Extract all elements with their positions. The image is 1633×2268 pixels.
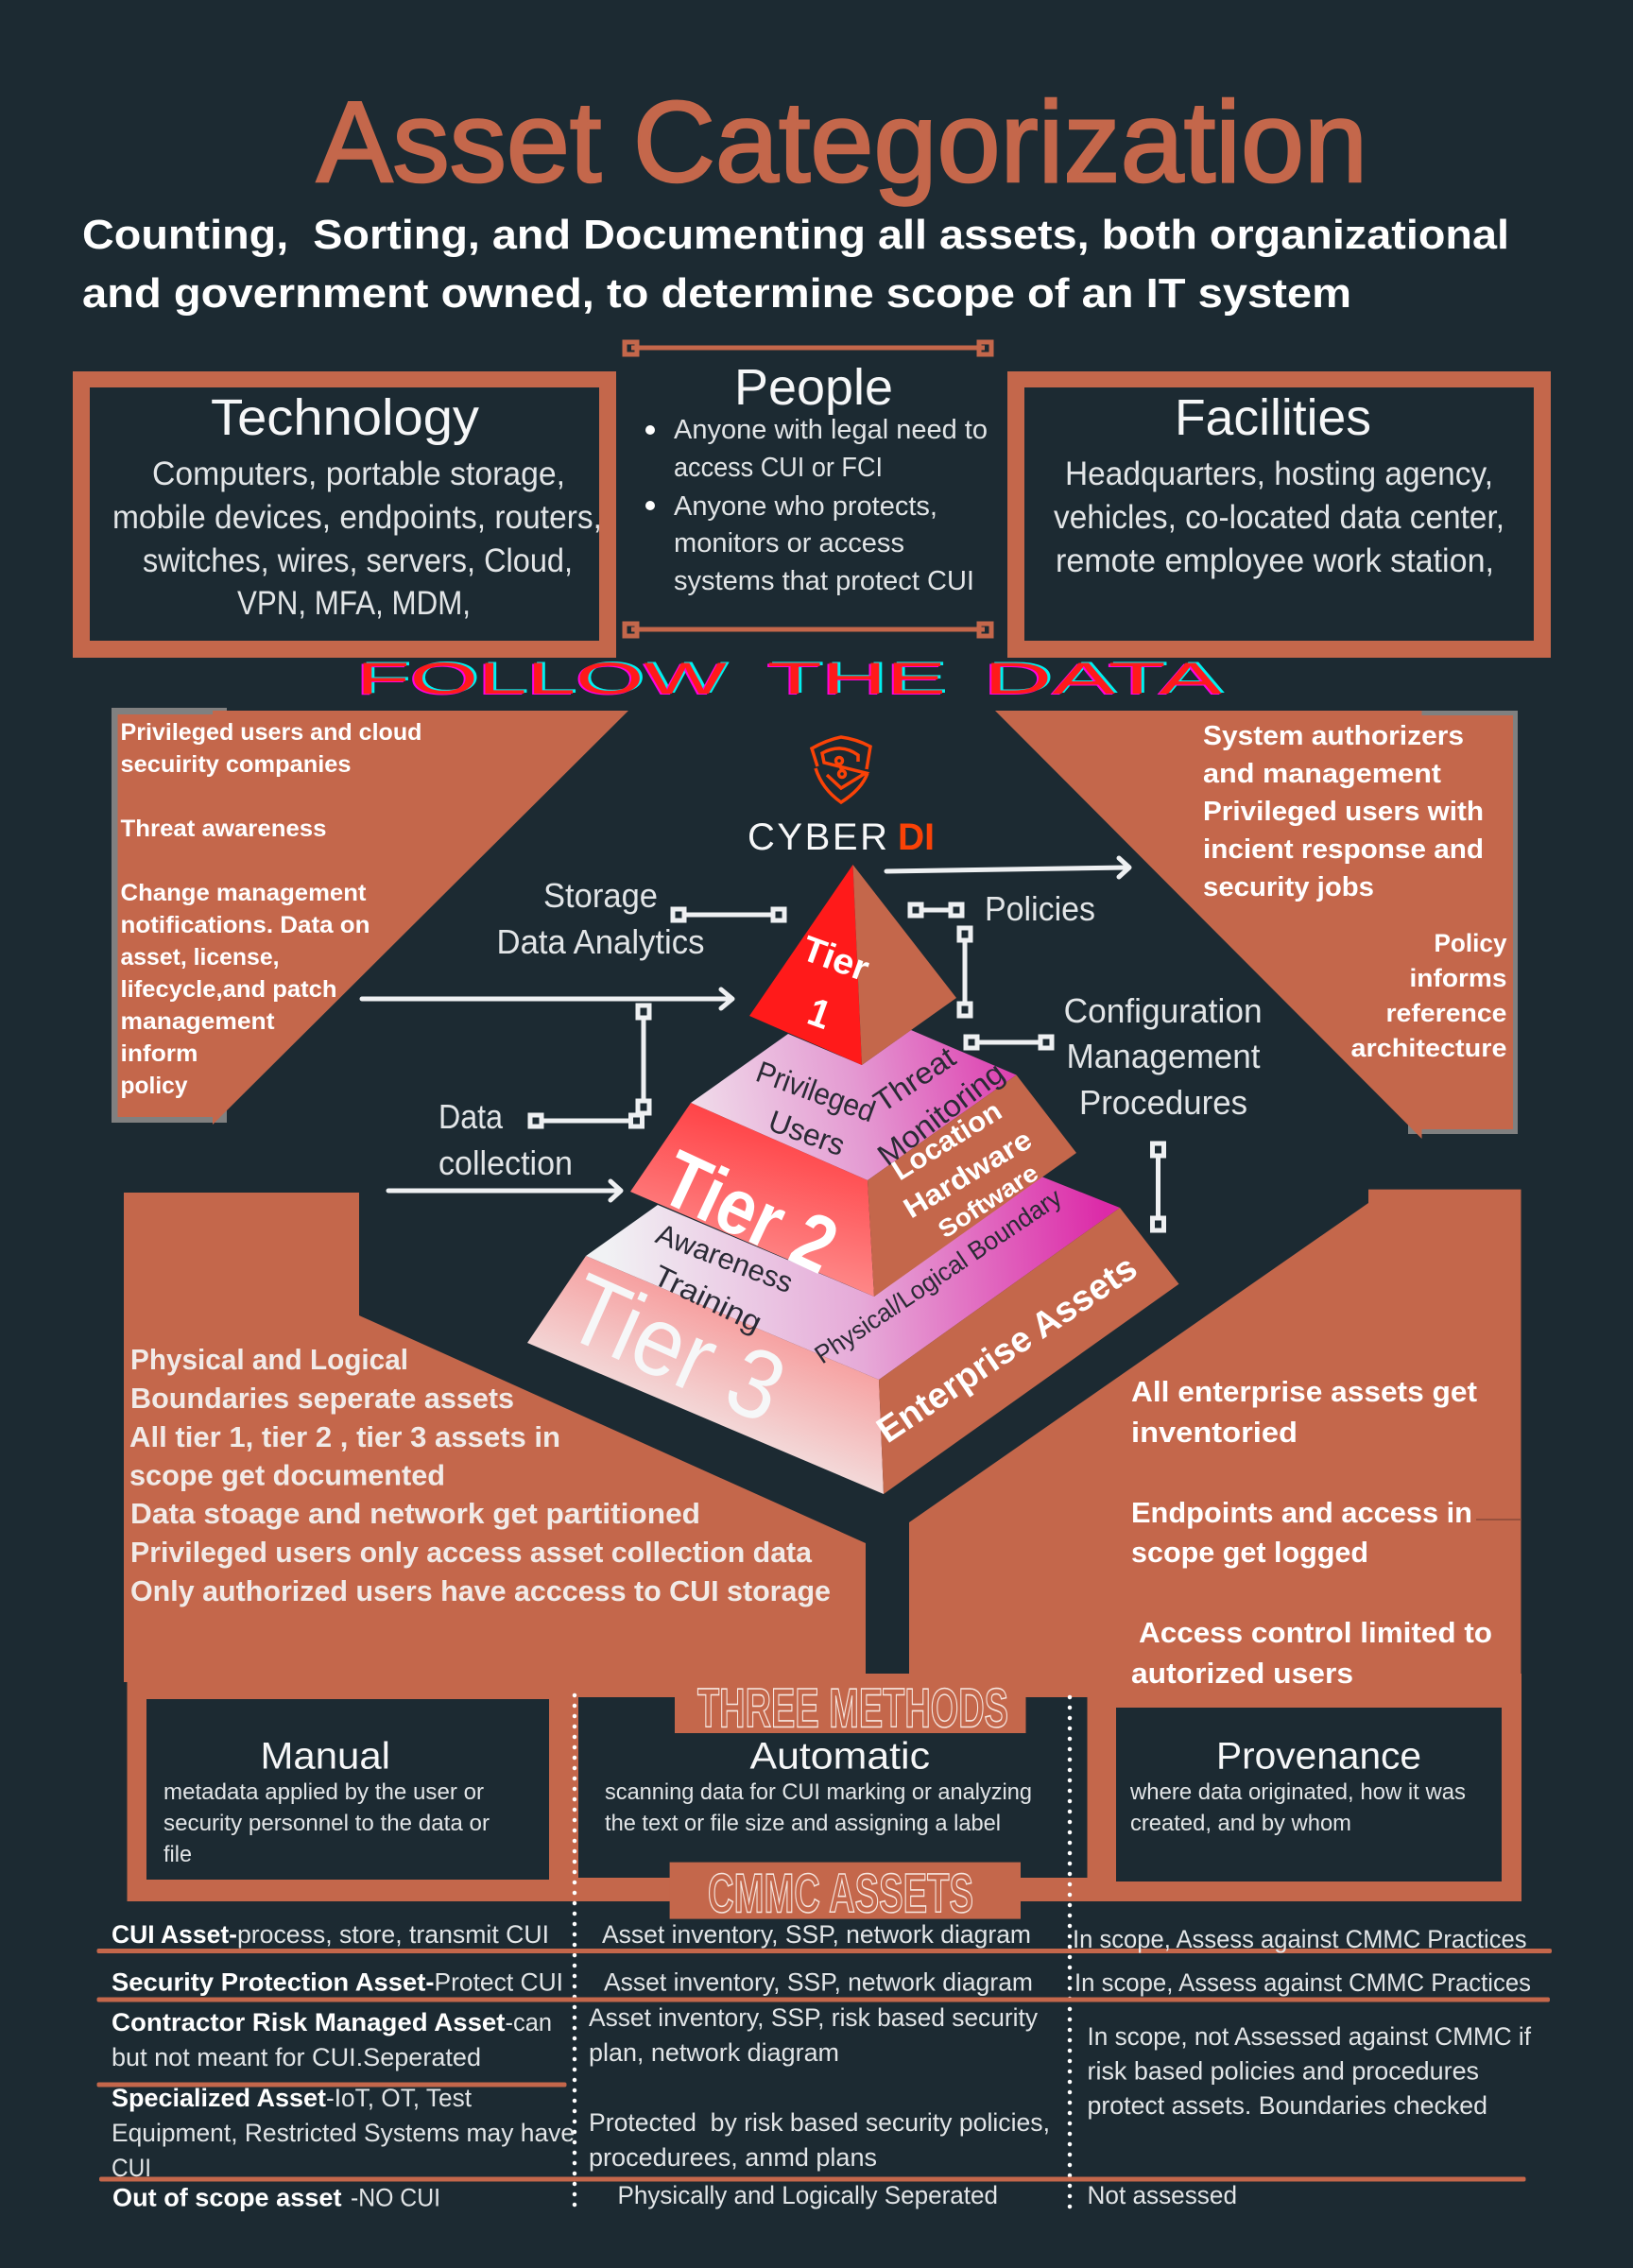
text: technology list bbox=[112, 455, 602, 622]
column: asset names: -NO CUI bbox=[351, 2183, 440, 2211]
heading: follow the data: FOLLOW bbox=[354, 654, 726, 704]
column: asset names: CUI Asset- bbox=[112, 1920, 237, 1949]
label: enterprise assets: Enterprise Assets bbox=[870, 1248, 1144, 1451]
column: asset names: Security Protection Asset- bbox=[112, 1967, 435, 1996]
label: awareness training: Awareness bbox=[651, 1217, 798, 1299]
heading: follow the data: FOLLOW bbox=[359, 652, 731, 702]
heading: follow the data: DATA bbox=[984, 653, 1223, 703]
panel: provenance: where data originated, how it was bbox=[1129, 1779, 1466, 1805]
label: location hardware software: Hardware bbox=[899, 1124, 1038, 1225]
column: requirements: Physically and Logically Seperated bbox=[618, 2181, 998, 2209]
text: top right policy: informs bbox=[1410, 964, 1506, 992]
text: bottom right block: All enterprise assets get bbox=[1131, 1375, 1477, 1408]
text: bottom left block: Boundaries seperate assets bbox=[130, 1382, 514, 1415]
label: configuration management procedures bbox=[1064, 991, 1263, 1122]
label: tier 1: Tier bbox=[797, 929, 874, 989]
dotted divider: left bbox=[573, 1695, 576, 2210]
label: storage data analytics bbox=[497, 876, 705, 961]
text: cyber: CYBER bbox=[748, 816, 887, 858]
label: physical logical boundary: Physical/Logical Boundary bbox=[810, 1183, 1067, 1369]
text: bottom right block: Access control limited to bbox=[1139, 1616, 1492, 1649]
text: di: DI bbox=[898, 816, 935, 858]
column: requirements: Asset inventory, SSP, risk based security bbox=[589, 2003, 1038, 2032]
tier 1 right face bbox=[852, 865, 956, 1065]
text: bottom left block: All tier 1, tier 2 , tier 3 assets in bbox=[129, 1420, 560, 1453]
label: tier 1: 1 bbox=[802, 988, 837, 1038]
text: bottom left block: Privileged users only access asset collection data bbox=[130, 1536, 813, 1569]
column: requirements: procedurees, anmd plans bbox=[589, 2143, 877, 2172]
panel: manual bbox=[146, 1699, 549, 1880]
column: requirements bbox=[589, 1920, 1050, 2209]
text: top left triangle: notifications. Data on bbox=[121, 912, 370, 938]
connector: people top bbox=[625, 342, 991, 354]
label: data collection bbox=[438, 1097, 573, 1182]
label: location hardware software: Location bbox=[886, 1095, 1007, 1187]
connector: policies vertical bbox=[959, 928, 971, 1016]
text: top right policy: reference bbox=[1385, 999, 1506, 1027]
text: bottom left block bbox=[129, 1343, 831, 1607]
label: threat monitoring: Monitoring bbox=[871, 1056, 1010, 1173]
panel: technology bbox=[73, 371, 616, 658]
label: location hardware software: Software bbox=[933, 1159, 1043, 1244]
heading: technology: Technology bbox=[211, 389, 479, 446]
panel: facilities bbox=[1007, 371, 1551, 658]
subtitle: and government owned, to determine scope of an IT system bbox=[82, 270, 1351, 317]
text: people bullets: systems that protect CUI bbox=[674, 566, 974, 596]
text: people bullets: Anyone who protects, bbox=[674, 491, 937, 522]
text: top left triangle: asset, license, bbox=[121, 944, 280, 971]
column: requirements: Asset inventory, SSP, network diagram bbox=[602, 1920, 1031, 1949]
text: bottom right block: scope get logged bbox=[1131, 1536, 1368, 1569]
text: top right policy: Policy bbox=[1435, 929, 1506, 957]
label: storage data analytics: Data Analytics bbox=[497, 922, 705, 961]
column: asset names: Contractor Risk Managed Asset bbox=[112, 2008, 505, 2036]
text: people bullets bbox=[645, 415, 988, 596]
column: asset names: -can bbox=[505, 2008, 552, 2036]
label: tier 3: Tier 3 bbox=[551, 1253, 800, 1445]
heading: facilities: Facilities bbox=[1175, 389, 1371, 446]
text: technology list: switches, wires, servers, Cloud, bbox=[143, 542, 573, 579]
text: bottom left block: scope get documented bbox=[129, 1459, 445, 1491]
tier 2 top face bbox=[691, 1030, 1017, 1180]
panel: manual: metadata applied by the user or bbox=[163, 1779, 484, 1805]
column: asset names: Specialized Asset bbox=[112, 2084, 326, 2112]
column: assessment: protect assets. Boundaries checked bbox=[1087, 2091, 1487, 2120]
heading: follow the data: DATA bbox=[987, 652, 1226, 702]
text: top right authorizers: System authorizers bbox=[1203, 721, 1464, 751]
panel: three methods bbox=[127, 1606, 1521, 1925]
panel: manual: file bbox=[163, 1842, 192, 1867]
connector: policies bbox=[910, 904, 962, 916]
text: top right authorizers: incient response and bbox=[1203, 834, 1484, 865]
connector: people bottom bbox=[625, 624, 991, 636]
panel: top left triangle bbox=[112, 708, 628, 1125]
title: Asset Categorization bbox=[317, 77, 1367, 206]
column: asset names: CUI bbox=[112, 2154, 151, 2182]
panel: bottom right block bbox=[909, 1190, 1521, 1692]
heading: follow the data bbox=[354, 652, 1226, 704]
tier 3 left face bbox=[527, 1256, 884, 1494]
heading: three methods bbox=[675, 1678, 1026, 1739]
subtitle bbox=[82, 212, 1509, 317]
column: assessment: risk based policies and procedures bbox=[1087, 2057, 1479, 2086]
text: top right policy bbox=[1351, 929, 1506, 1062]
text: top left triangle: management bbox=[121, 1008, 275, 1035]
panel: people bbox=[625, 342, 991, 636]
tier 2 left face bbox=[630, 1103, 874, 1297]
text: facilities list: vehicles, co-located data center, bbox=[1054, 499, 1504, 536]
connector: configuration bbox=[966, 1037, 1052, 1048]
text: bottom right block: autorized users bbox=[1131, 1657, 1353, 1690]
panel: automatic: scanning data for CUI marking or analyzing bbox=[605, 1779, 1032, 1805]
column: asset names: Equipment, Restricted Systems may have bbox=[112, 2119, 575, 2147]
text: top left triangle: Change management bbox=[121, 880, 367, 906]
text: facilities list: remote employee work station, bbox=[1056, 542, 1494, 579]
text: top right policy: architecture bbox=[1351, 1034, 1506, 1062]
panel: automatic bbox=[578, 1697, 1087, 1878]
label: configuration management procedures: Management bbox=[1066, 1037, 1261, 1075]
text: bottom right block: inventoried bbox=[1131, 1416, 1298, 1449]
column: asset names bbox=[112, 1920, 575, 2211]
subtitle: Counting, Sorting, and Documenting all assets, both organizational bbox=[82, 212, 1509, 258]
text: facilities list bbox=[1054, 455, 1504, 579]
connector: left vertical bbox=[638, 1005, 649, 1113]
label: configuration management procedures: Procedures bbox=[1079, 1083, 1247, 1122]
dotted divider: right bbox=[1068, 1697, 1072, 2212]
text: top left triangle: lifecycle,and patch bbox=[121, 976, 336, 1003]
text: top left triangle bbox=[121, 719, 422, 1099]
label: awareness training: Training bbox=[648, 1259, 767, 1339]
text: bottom left block: Data stoage and network get partitioned bbox=[130, 1497, 700, 1530]
text: bottom right block bbox=[1131, 1375, 1492, 1690]
text: facilities list: Headquarters, hosting agency, bbox=[1065, 455, 1493, 492]
panel: manual: Manual bbox=[261, 1735, 390, 1777]
text: technology list: Computers, portable storage, bbox=[152, 455, 565, 492]
column: requirements: Protected by risk based security policies, bbox=[589, 2108, 1050, 2137]
pyramid bbox=[527, 865, 1179, 1494]
label: policies: Policies bbox=[985, 889, 1095, 928]
column: requirements: plan, network diagram bbox=[589, 2038, 839, 2067]
text: top right authorizers: Privileged users with bbox=[1203, 797, 1484, 827]
table: cmmc assets bbox=[96, 1920, 1552, 2211]
heading: follow the data: DATA bbox=[982, 654, 1221, 704]
column: assessment: In scope, Assess against CMMC Practices bbox=[1074, 1968, 1531, 1997]
panel: automatic: the text or file size and assigning a label bbox=[605, 1811, 1001, 1836]
label: threat monitoring: Threat bbox=[868, 1040, 962, 1119]
label: tier 2: Tier 2 bbox=[648, 1133, 851, 1290]
text: people bullets: access CUI or FCI bbox=[674, 453, 883, 483]
heading: follow the data: THE bbox=[765, 654, 944, 704]
label: privileged users: Users bbox=[765, 1104, 850, 1162]
arrow: left triangle to tier 1 bbox=[362, 989, 732, 1008]
column: requirements: Asset inventory, SSP, network diagram bbox=[604, 1967, 1033, 1996]
label: data collection: Data bbox=[438, 1097, 504, 1136]
panel: provenance bbox=[1116, 1708, 1502, 1881]
arrow: tier 1 to right triangle bbox=[886, 858, 1129, 877]
arrow: data collection to tier 2 bbox=[388, 1181, 621, 1200]
panel: manual: security personnel to the data or bbox=[163, 1811, 490, 1836]
text: top left triangle: policy bbox=[121, 1073, 188, 1099]
text: bottom left block: Physical and Logical bbox=[130, 1343, 408, 1376]
heading: people: People bbox=[734, 359, 893, 416]
text: top left triangle: secuirity companies bbox=[121, 751, 352, 778]
column: asset names: Protect CUI bbox=[435, 1967, 563, 1996]
logo: cyberdi bbox=[748, 737, 935, 858]
text: top right authorizers: and management bbox=[1203, 759, 1441, 789]
panel: provenance: Provenance bbox=[1216, 1735, 1421, 1777]
column: assessment: In scope, Assess against CMMC Practices bbox=[1073, 1925, 1527, 1953]
text: top left triangle: Privileged users and cloud bbox=[121, 719, 422, 746]
panel: bottom left block bbox=[124, 1193, 866, 1682]
connector: data collection bbox=[530, 1115, 643, 1126]
text: technology list: VPN, MFA, MDM, bbox=[237, 585, 471, 622]
label: configuration management procedures: Configuration bbox=[1064, 991, 1263, 1030]
heading: follow the data: THE bbox=[770, 652, 949, 702]
text: top right authorizers: security jobs bbox=[1203, 872, 1374, 902]
panel: provenance: created, and by whom bbox=[1130, 1811, 1351, 1836]
text: bottom right block: Endpoints and access in bbox=[1131, 1496, 1472, 1529]
label: awareness training bbox=[648, 1217, 798, 1339]
column: assessment: In scope, not Assessed against CMMC if bbox=[1087, 2022, 1531, 2051]
text: top right authorizers bbox=[1203, 721, 1484, 902]
heading: follow the data: FOLLOW bbox=[356, 653, 728, 703]
column: assessment: Not assessed bbox=[1087, 2181, 1237, 2209]
column: asset names: but not meant for CUI.Seperated bbox=[112, 2043, 481, 2071]
heading: three methods: THREE METHODS bbox=[697, 1678, 1008, 1739]
text: bottom left block: Only authorized users have acccess to CUI storage bbox=[130, 1574, 831, 1607]
label: tier 1 bbox=[797, 929, 874, 1038]
tier 3 top face bbox=[586, 1176, 1120, 1380]
heading: follow the data: THE bbox=[767, 653, 946, 703]
icon: shield bbox=[812, 737, 870, 802]
label: storage data analytics: Storage bbox=[543, 876, 658, 915]
tier 3 right face bbox=[879, 1208, 1179, 1494]
label: privileged users bbox=[752, 1055, 880, 1162]
tier 1 left face bbox=[749, 865, 862, 1065]
label: data collection: collection bbox=[438, 1143, 573, 1182]
label: location hardware software bbox=[886, 1095, 1043, 1244]
text: top left triangle: inform bbox=[121, 1040, 198, 1067]
text: technology list: mobile devices, endpoints, routers, bbox=[112, 499, 602, 536]
column: asset names: process, store, transmit CUI bbox=[237, 1920, 549, 1949]
connector: procedures vertical bbox=[1153, 1143, 1164, 1230]
tier 2 right face bbox=[868, 1075, 1076, 1297]
panel: automatic: Automatic bbox=[750, 1735, 930, 1777]
label: privileged users: Privileged bbox=[752, 1055, 880, 1128]
text: people bullets: monitors or access bbox=[674, 528, 904, 558]
text: people bullets: Anyone with legal need to bbox=[674, 415, 988, 445]
column: assessment bbox=[1073, 1925, 1531, 2209]
heading: cmmc assets: CMMC ASSETS bbox=[708, 1864, 973, 1925]
column: asset names: -IoT, OT, Test bbox=[326, 2084, 472, 2112]
panel: top right triangle bbox=[995, 711, 1518, 1139]
text: top left triangle: Threat awareness bbox=[121, 816, 327, 842]
column: asset names: Out of scope asset bbox=[112, 2183, 342, 2211]
connector: storage bbox=[673, 909, 784, 920]
